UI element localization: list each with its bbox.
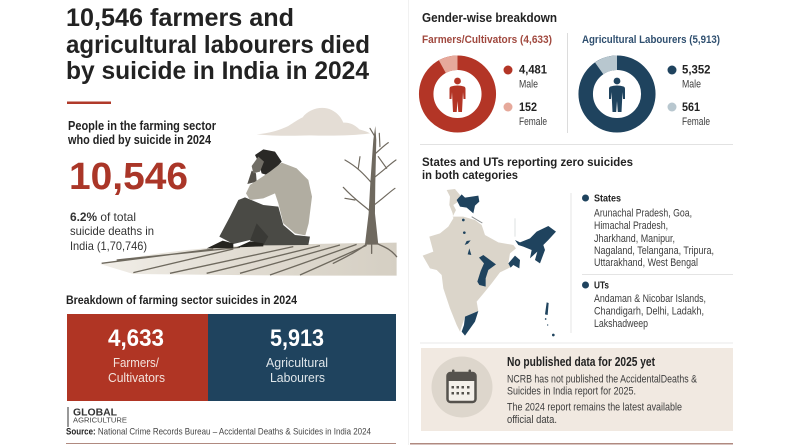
icon: person — [609, 78, 625, 112]
title: by suicide in India in 2024 — [66, 57, 369, 85]
panel: headline statistic — [67, 119, 216, 253]
legend: farmers male: 4,481 — [519, 64, 548, 76]
map of India — [423, 189, 556, 336]
logo: AGRICULTURE — [73, 416, 127, 424]
list: states: Himachal Pradesh, — [594, 220, 668, 232]
list: states: Uttarakhand, West Bengal — [594, 257, 698, 269]
callout text: No published data for 2025 yet — [507, 355, 656, 369]
callout text: official data. — [507, 414, 557, 426]
panel: labourers total: 5,913 — [270, 325, 324, 352]
icon: person — [450, 78, 466, 112]
ploughed ground — [100, 243, 397, 276]
legend: farmers female — [504, 102, 547, 128]
list: states: Jharkhand, Manipur, — [594, 233, 675, 245]
heading: zero suicides — [422, 155, 633, 182]
callout text: NCRB has not published the AccidentalDeaths & — [507, 374, 698, 386]
source: Source: National Crime Records Bureau – Accidental Deaths & Suicides in India 2024 — [66, 426, 371, 438]
panel: farmers gender split: Farmers/Cultivators (4,633) — [422, 34, 552, 46]
donut chart: farmers — [426, 55, 489, 125]
legend: farmers female: Female — [519, 116, 547, 128]
list: states — [582, 192, 714, 269]
title: 10,546 farmers and — [66, 4, 294, 32]
callout text — [507, 355, 698, 426]
callout text: The 2024 report remains the latest available — [507, 402, 682, 414]
panel: farmers total — [67, 314, 208, 401]
list: states: Arunachal Pradesh, Goa, — [594, 208, 692, 220]
tree — [333, 126, 397, 263]
stat heading: who died by suicide in 2024 — [67, 133, 211, 147]
share of total deaths — [70, 210, 154, 253]
stat heading: People in the farming sector — [68, 119, 216, 133]
heading: zero suicides: in both categories — [422, 168, 518, 182]
list: union territories: UTs — [594, 280, 609, 292]
list: states: Nagaland, Telangana, Tripura, — [594, 245, 714, 257]
legend: farmers male — [504, 64, 548, 90]
logo — [68, 406, 127, 427]
share of total deaths: India (1,70,746) — [70, 239, 147, 253]
panel: labourers gender split: Agricultural Labourers (5,913) — [582, 34, 720, 46]
list: union territories: Lakshadweep — [594, 318, 648, 330]
panel: farmers total: 4,633 — [108, 325, 164, 352]
list: union territories: Chandigarh, Delhi, Ladakh, — [594, 306, 704, 318]
legend: farmers male: Male — [519, 78, 538, 90]
cloud — [257, 108, 370, 136]
icon: calendar — [432, 356, 492, 418]
panel: labourers total: Agricultural — [266, 355, 328, 370]
panel: no data for 2025 — [421, 348, 733, 431]
list: states: States — [594, 192, 621, 204]
donut chart: labourers — [586, 56, 648, 125]
share of total deaths: 6.2% of total — [70, 210, 136, 224]
heading: gender-wise breakdown: Gender-wise breakdown — [422, 11, 557, 25]
panel: labourers total: Labourers — [270, 370, 325, 385]
panel: labourers gender split — [582, 34, 720, 128]
panel: farmers total: Cultivators — [108, 370, 165, 385]
legend: labourers male: 5,352 — [682, 64, 710, 76]
title: agricultural labourers died — [66, 31, 370, 59]
callout text: Suicides in India report for 2025. — [507, 386, 636, 398]
heading: breakdown: Breakdown of farming sector suicides in 2024 — [66, 293, 297, 307]
big number: 10,546 — [69, 156, 188, 198]
title — [66, 4, 370, 85]
list: union territories — [582, 280, 706, 330]
stat heading — [67, 119, 216, 147]
panel: farmers gender split — [422, 34, 552, 128]
share of total deaths: suicide deaths in — [70, 224, 154, 238]
panel: farmers total: Farmers/ — [113, 355, 159, 370]
list: union territories: Andaman & Nicobar Islands, — [594, 293, 706, 305]
panel: labourers total — [208, 314, 396, 401]
person — [207, 149, 312, 248]
legend: labourers female: Female — [682, 116, 710, 128]
legend: labourers female — [668, 102, 710, 128]
legend: labourers female: 561 — [682, 102, 701, 114]
legend: labourers male — [668, 64, 710, 90]
illustration: grieving farmer beside a dead tree — [100, 108, 397, 276]
zero-suicide regions — [457, 194, 556, 336]
legend: labourers male: Male — [682, 78, 701, 90]
logo: GLOBAL — [73, 406, 118, 418]
legend: farmers female: 152 — [519, 102, 537, 114]
heading: zero suicides: States and UTs reporting zero suicides — [422, 155, 633, 169]
